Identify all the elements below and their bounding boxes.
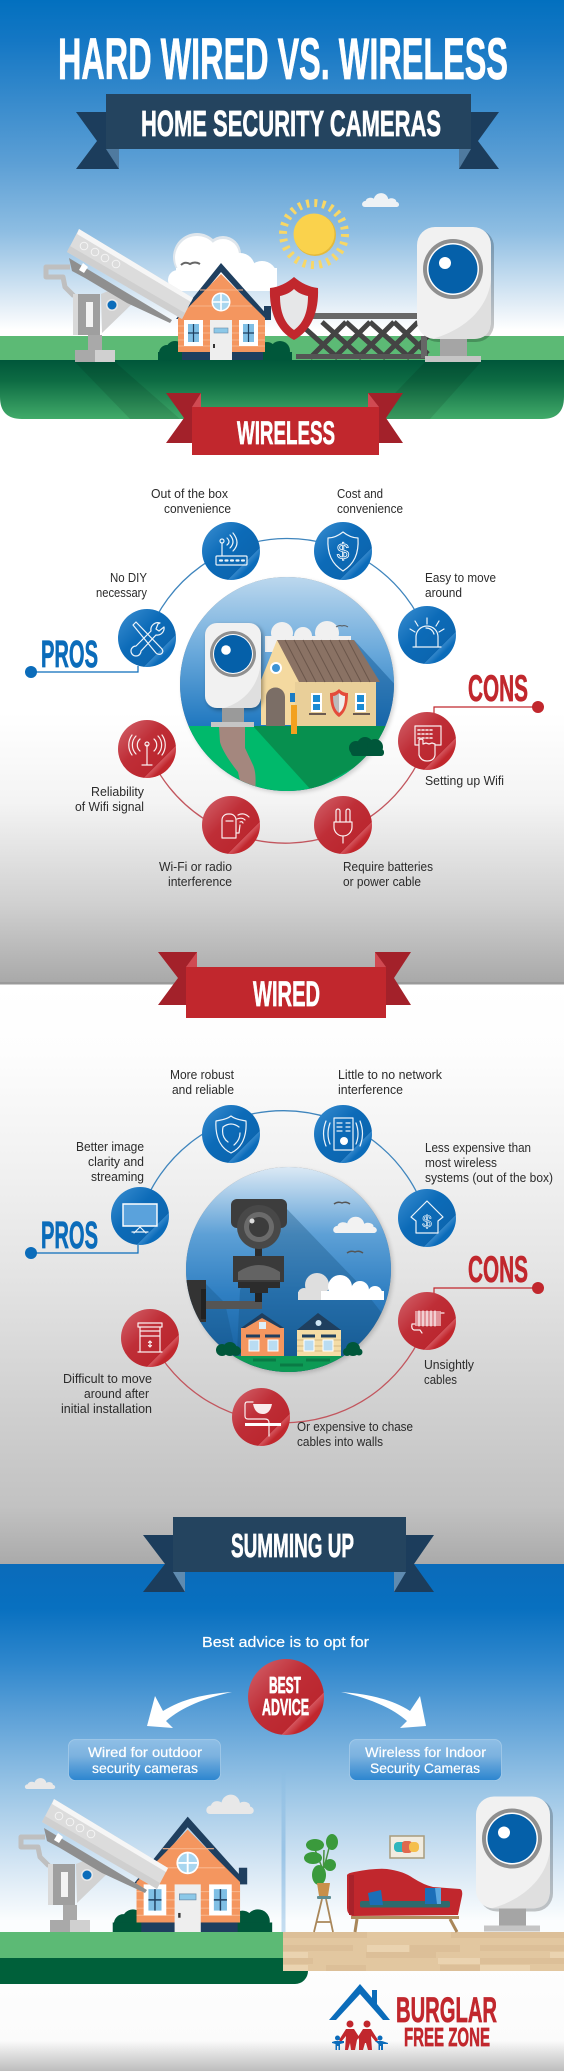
arrow: left	[147, 1692, 232, 1728]
icon: wireless box	[202, 796, 260, 854]
divider	[282, 1770, 286, 1932]
label box: wireless for indoor: Wireless for Indoor	[365, 1744, 486, 1760]
label: reliability of wifi signal	[75, 785, 145, 814]
icon: house with dollar	[398, 1189, 456, 1247]
label: little to no network interference: interference	[338, 1083, 403, 1097]
label: more robust and reliable	[170, 1068, 234, 1097]
icon: radiator	[398, 1292, 456, 1350]
label: reliability of wifi signal: Reliability	[91, 785, 145, 799]
label box: wireless for indoor	[350, 1740, 502, 1780]
house	[158, 263, 292, 361]
label: wi-fi or radio interference: interference	[168, 875, 232, 889]
icon: keypad	[398, 712, 456, 770]
badge: best advice: ADVICE	[262, 1694, 309, 1720]
ribbon: wired	[158, 952, 411, 1018]
icon: window blind	[121, 1309, 179, 1367]
icon: shield outline	[202, 1105, 260, 1163]
wireless camera	[417, 227, 494, 362]
hero scene	[0, 193, 564, 419]
bush	[349, 737, 384, 756]
ribbon: wireless	[166, 393, 403, 455]
icon: monitor	[111, 1187, 169, 1245]
label: less expensive than most wireless systems	[425, 1141, 553, 1185]
icon: house with dollar: $	[422, 1212, 432, 1231]
background: wireless section	[0, 340, 564, 982]
label: cost and convenience	[337, 487, 403, 516]
label: little to no network interference	[338, 1068, 443, 1097]
sun	[283, 203, 345, 265]
label: no DIY necessary: necessary	[96, 586, 148, 600]
label: require batteries or power cable	[343, 860, 433, 889]
label: less expensive than most wireless systems: most wireless	[425, 1156, 497, 1170]
background: summing up sky	[0, 1564, 564, 1932]
logo	[329, 1984, 497, 2052]
large cloud	[168, 233, 277, 291]
label: better image clarity and streaming: clarity and	[88, 1155, 144, 1169]
floor	[283, 1932, 564, 1971]
background: footer	[0, 1932, 564, 2071]
label: difficult to move around after initial installation: Difficult to move	[63, 1372, 152, 1386]
background: top sky	[0, 0, 564, 340]
bullet camera	[21, 1799, 168, 1932]
icon: tools (no DIY)	[118, 609, 176, 667]
camera in circle	[205, 623, 261, 727]
label box: wired for outdoor: security cameras	[92, 1760, 198, 1776]
wireless camera	[476, 1796, 553, 1932]
arrow: right	[341, 1692, 426, 1728]
icon: alarm light	[398, 606, 456, 664]
label: easy to move around	[425, 571, 496, 600]
ring connector: wired cons	[150, 1321, 427, 1423]
label: difficult to move around after initial installation: initial installation	[61, 1402, 152, 1416]
icon: router	[202, 522, 260, 580]
ribbon: wireless: WIRELESS	[237, 415, 335, 451]
logo text: FREE ZONE	[404, 2022, 490, 2052]
ring connector: wired pros	[140, 1111, 427, 1218]
label box: wired for outdoor	[68, 1740, 220, 1780]
ring connector: wireless cons	[147, 741, 427, 843]
bullet camera	[46, 229, 193, 362]
indoor scene	[283, 1796, 564, 1971]
background: wired section	[0, 984, 564, 1564]
label: more robust and reliable: and reliable	[172, 1083, 234, 1097]
label: no DIY necessary: No DIY	[110, 571, 148, 585]
callout: wired pros: PROS	[41, 1215, 98, 1257]
banner: summing up	[143, 1517, 434, 1592]
banner: summing up: SUMMING UP	[231, 1527, 354, 1564]
label: difficult to move around after initial installation: around after	[84, 1387, 149, 1401]
label: better image clarity and streaming: streaming	[91, 1170, 144, 1184]
bushes	[216, 1342, 362, 1356]
birds	[181, 262, 200, 265]
ground	[0, 1932, 308, 1984]
icon: document with signal	[314, 1105, 372, 1163]
fence	[296, 313, 428, 359]
icon: dome camera wired	[232, 1388, 290, 1446]
label: unsightly cables: Unsightly	[424, 1358, 475, 1372]
label: or expensive to chase cables into walls: cables into walls	[297, 1435, 383, 1449]
callout: wireless cons	[434, 668, 544, 713]
label: more robust and reliable: More robust	[170, 1068, 234, 1082]
icon: shield with dollar: $	[337, 539, 349, 564]
label: out of the box convenience: convenience	[164, 502, 231, 516]
center illustration: wired	[186, 1167, 395, 1376]
label: require batteries or power cable: Require batteries	[343, 860, 433, 874]
icon: signal tower	[118, 720, 176, 778]
label: wi-fi or radio interference: Wi-Fi or radio	[159, 860, 232, 874]
logo house	[329, 1984, 390, 2020]
logo text	[396, 1991, 497, 2052]
ribbon: wired: WIRED	[253, 975, 320, 1014]
label: out of the box convenience	[151, 487, 231, 516]
badge: best advice: BEST	[269, 1672, 301, 1698]
label: less expensive than most wireless systems: Less expensive than	[425, 1141, 531, 1155]
callout: wireless pros: PROS	[41, 634, 98, 676]
label: little to no network interference: Little to no network	[338, 1068, 443, 1082]
label: cost and convenience: convenience	[337, 502, 403, 516]
picture	[390, 1836, 424, 1858]
label: difficult to move around after initial installation	[61, 1372, 152, 1416]
label: easy to move around: Easy to move	[425, 571, 496, 585]
ground	[0, 336, 564, 419]
logo family	[332, 2020, 388, 2050]
label: less expensive than most wireless systems: systems (out of the box)	[425, 1171, 553, 1185]
label: setting up wifi: Setting up Wifi	[425, 774, 504, 788]
sofa	[347, 1869, 462, 1932]
callout: wired cons	[434, 1249, 544, 1294]
label: wi-fi or radio interference	[159, 860, 232, 889]
label box: wireless for indoor: Security Cameras	[370, 1760, 480, 1776]
label box: wired for outdoor: Wired for outdoor	[88, 1744, 202, 1760]
shield	[270, 277, 318, 340]
label: easy to move around: around	[425, 586, 462, 600]
icon: shield with dollar	[314, 522, 372, 580]
label: better image clarity and streaming: Better image	[76, 1140, 144, 1154]
house	[113, 1817, 272, 1933]
badge: best advice	[248, 1659, 324, 1735]
plant	[304, 1834, 338, 1932]
subtitle banner	[76, 94, 499, 169]
label: better image clarity and streaming	[76, 1140, 144, 1184]
outdoor scene	[0, 1778, 308, 1984]
label: require batteries or power cable: or power cable	[343, 875, 421, 889]
label: or expensive to chase cables into walls: Or expensive to chase	[297, 1420, 413, 1434]
ring connector: wireless pros	[147, 538, 427, 638]
center illustration: wireless	[180, 577, 400, 796]
clouds	[25, 1778, 254, 1814]
label: unsightly cables: cables	[424, 1373, 457, 1387]
small cloud	[362, 193, 399, 207]
label: reliability of wifi signal: of Wifi signal	[75, 800, 144, 814]
label: cost and convenience: Cost and	[337, 487, 383, 501]
label: unsightly cables	[424, 1358, 475, 1387]
label: out of the box convenience: Out of the box	[151, 487, 229, 501]
label: no DIY necessary	[96, 571, 148, 600]
heading: best advice is to opt for: Best advice is to opt for	[202, 1634, 369, 1651]
icon: plug	[314, 796, 372, 854]
label: or expensive to chase cables into walls	[297, 1420, 413, 1449]
